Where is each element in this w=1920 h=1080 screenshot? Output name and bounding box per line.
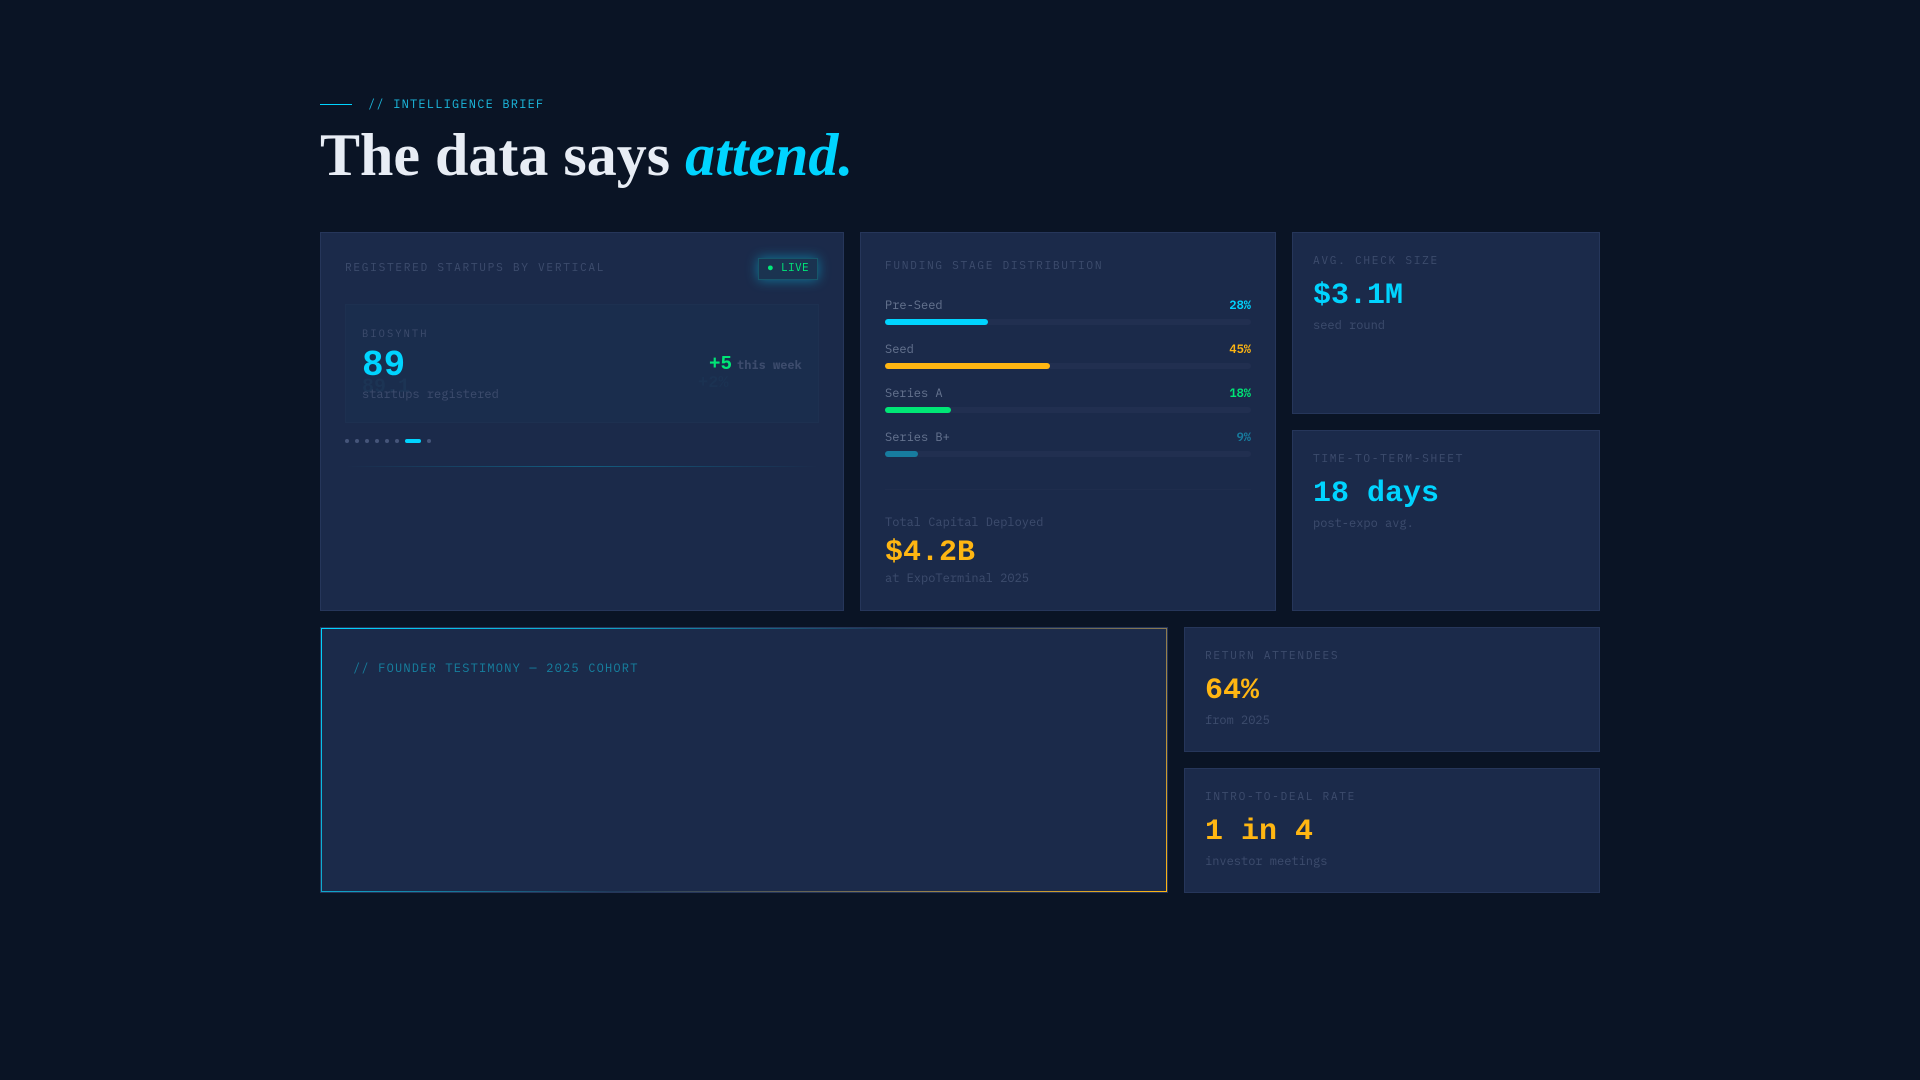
stat label: RETURN ATTENDEES xyxy=(1205,649,1339,663)
total capital label: Total Capital Deployed xyxy=(885,515,1043,530)
bar: seed: 45% xyxy=(1229,342,1251,357)
stat card: return attendees xyxy=(1184,627,1600,752)
stat caption: seed round xyxy=(1313,318,1385,333)
bar: pre-seed: Pre-Seed xyxy=(885,298,943,313)
stat card: intro to deal rate xyxy=(1184,768,1600,893)
panel: founder testimony xyxy=(320,627,1168,893)
bar: series a: Series A xyxy=(885,386,943,401)
bar: pre-seed xyxy=(885,298,1251,325)
stat label: AVG. CHECK SIZE xyxy=(1313,254,1439,268)
live badge xyxy=(758,258,818,280)
testimony label: // FOUNDER TESTIMONY — 2025 COHORT xyxy=(353,661,639,676)
bar: series a xyxy=(885,386,1251,413)
ghost figure left: 89.1 xyxy=(362,376,410,399)
total capital value: $4.2B xyxy=(885,536,975,570)
count caption: startups registered xyxy=(362,387,499,402)
stat value: 64% xyxy=(1205,674,1259,708)
stat label: INTRO-TO-DEAL RATE xyxy=(1205,790,1356,804)
live badge: ● LIVE xyxy=(767,261,809,275)
bar: seed: Seed xyxy=(885,342,914,357)
bar: series a: 18% xyxy=(1229,386,1251,401)
total capital caption: at ExpoTerminal 2025 xyxy=(885,571,1029,586)
vertical slide: biosynth xyxy=(345,304,819,423)
eyebrow: intelligence brief: // INTELLIGENCE BRIEF xyxy=(368,97,544,112)
stat caption: post-expo avg. xyxy=(1313,516,1414,531)
panel: funding stage distribution xyxy=(860,232,1276,611)
title: The data says attend. xyxy=(320,122,853,188)
stat value: 18 days xyxy=(1313,477,1439,511)
stat card: avg check size xyxy=(1292,232,1600,414)
stat value: $3.1M xyxy=(1313,279,1403,313)
panel heading: funding: FUNDING STAGE DISTRIBUTION xyxy=(885,259,1103,273)
stat value: 1 in 4 xyxy=(1205,815,1313,849)
panel: registered startups by vertical xyxy=(320,232,844,611)
panel heading: registered startups: REGISTERED STARTUPS BY VERTICAL xyxy=(345,261,605,275)
bar: seed xyxy=(885,342,1251,369)
bar: series b+: Series B+ xyxy=(885,430,950,445)
carousel dots xyxy=(345,439,431,443)
stat card: time to term sheet xyxy=(1292,430,1600,611)
stat label: TIME-TO-TERM-SHEET xyxy=(1313,452,1464,466)
startup count: 89 xyxy=(362,345,405,386)
stat caption: investor meetings xyxy=(1205,854,1327,869)
ghost figure right: +2% xyxy=(698,374,729,393)
bar: pre-seed: 28% xyxy=(1229,298,1251,313)
bar: series b+ xyxy=(885,430,1251,457)
bar: series b+: 9% xyxy=(1237,430,1251,445)
weekly change: +5 this week xyxy=(709,353,802,375)
vertical name: BIOSYNTH xyxy=(362,326,429,340)
stat caption: from 2025 xyxy=(1205,713,1270,728)
